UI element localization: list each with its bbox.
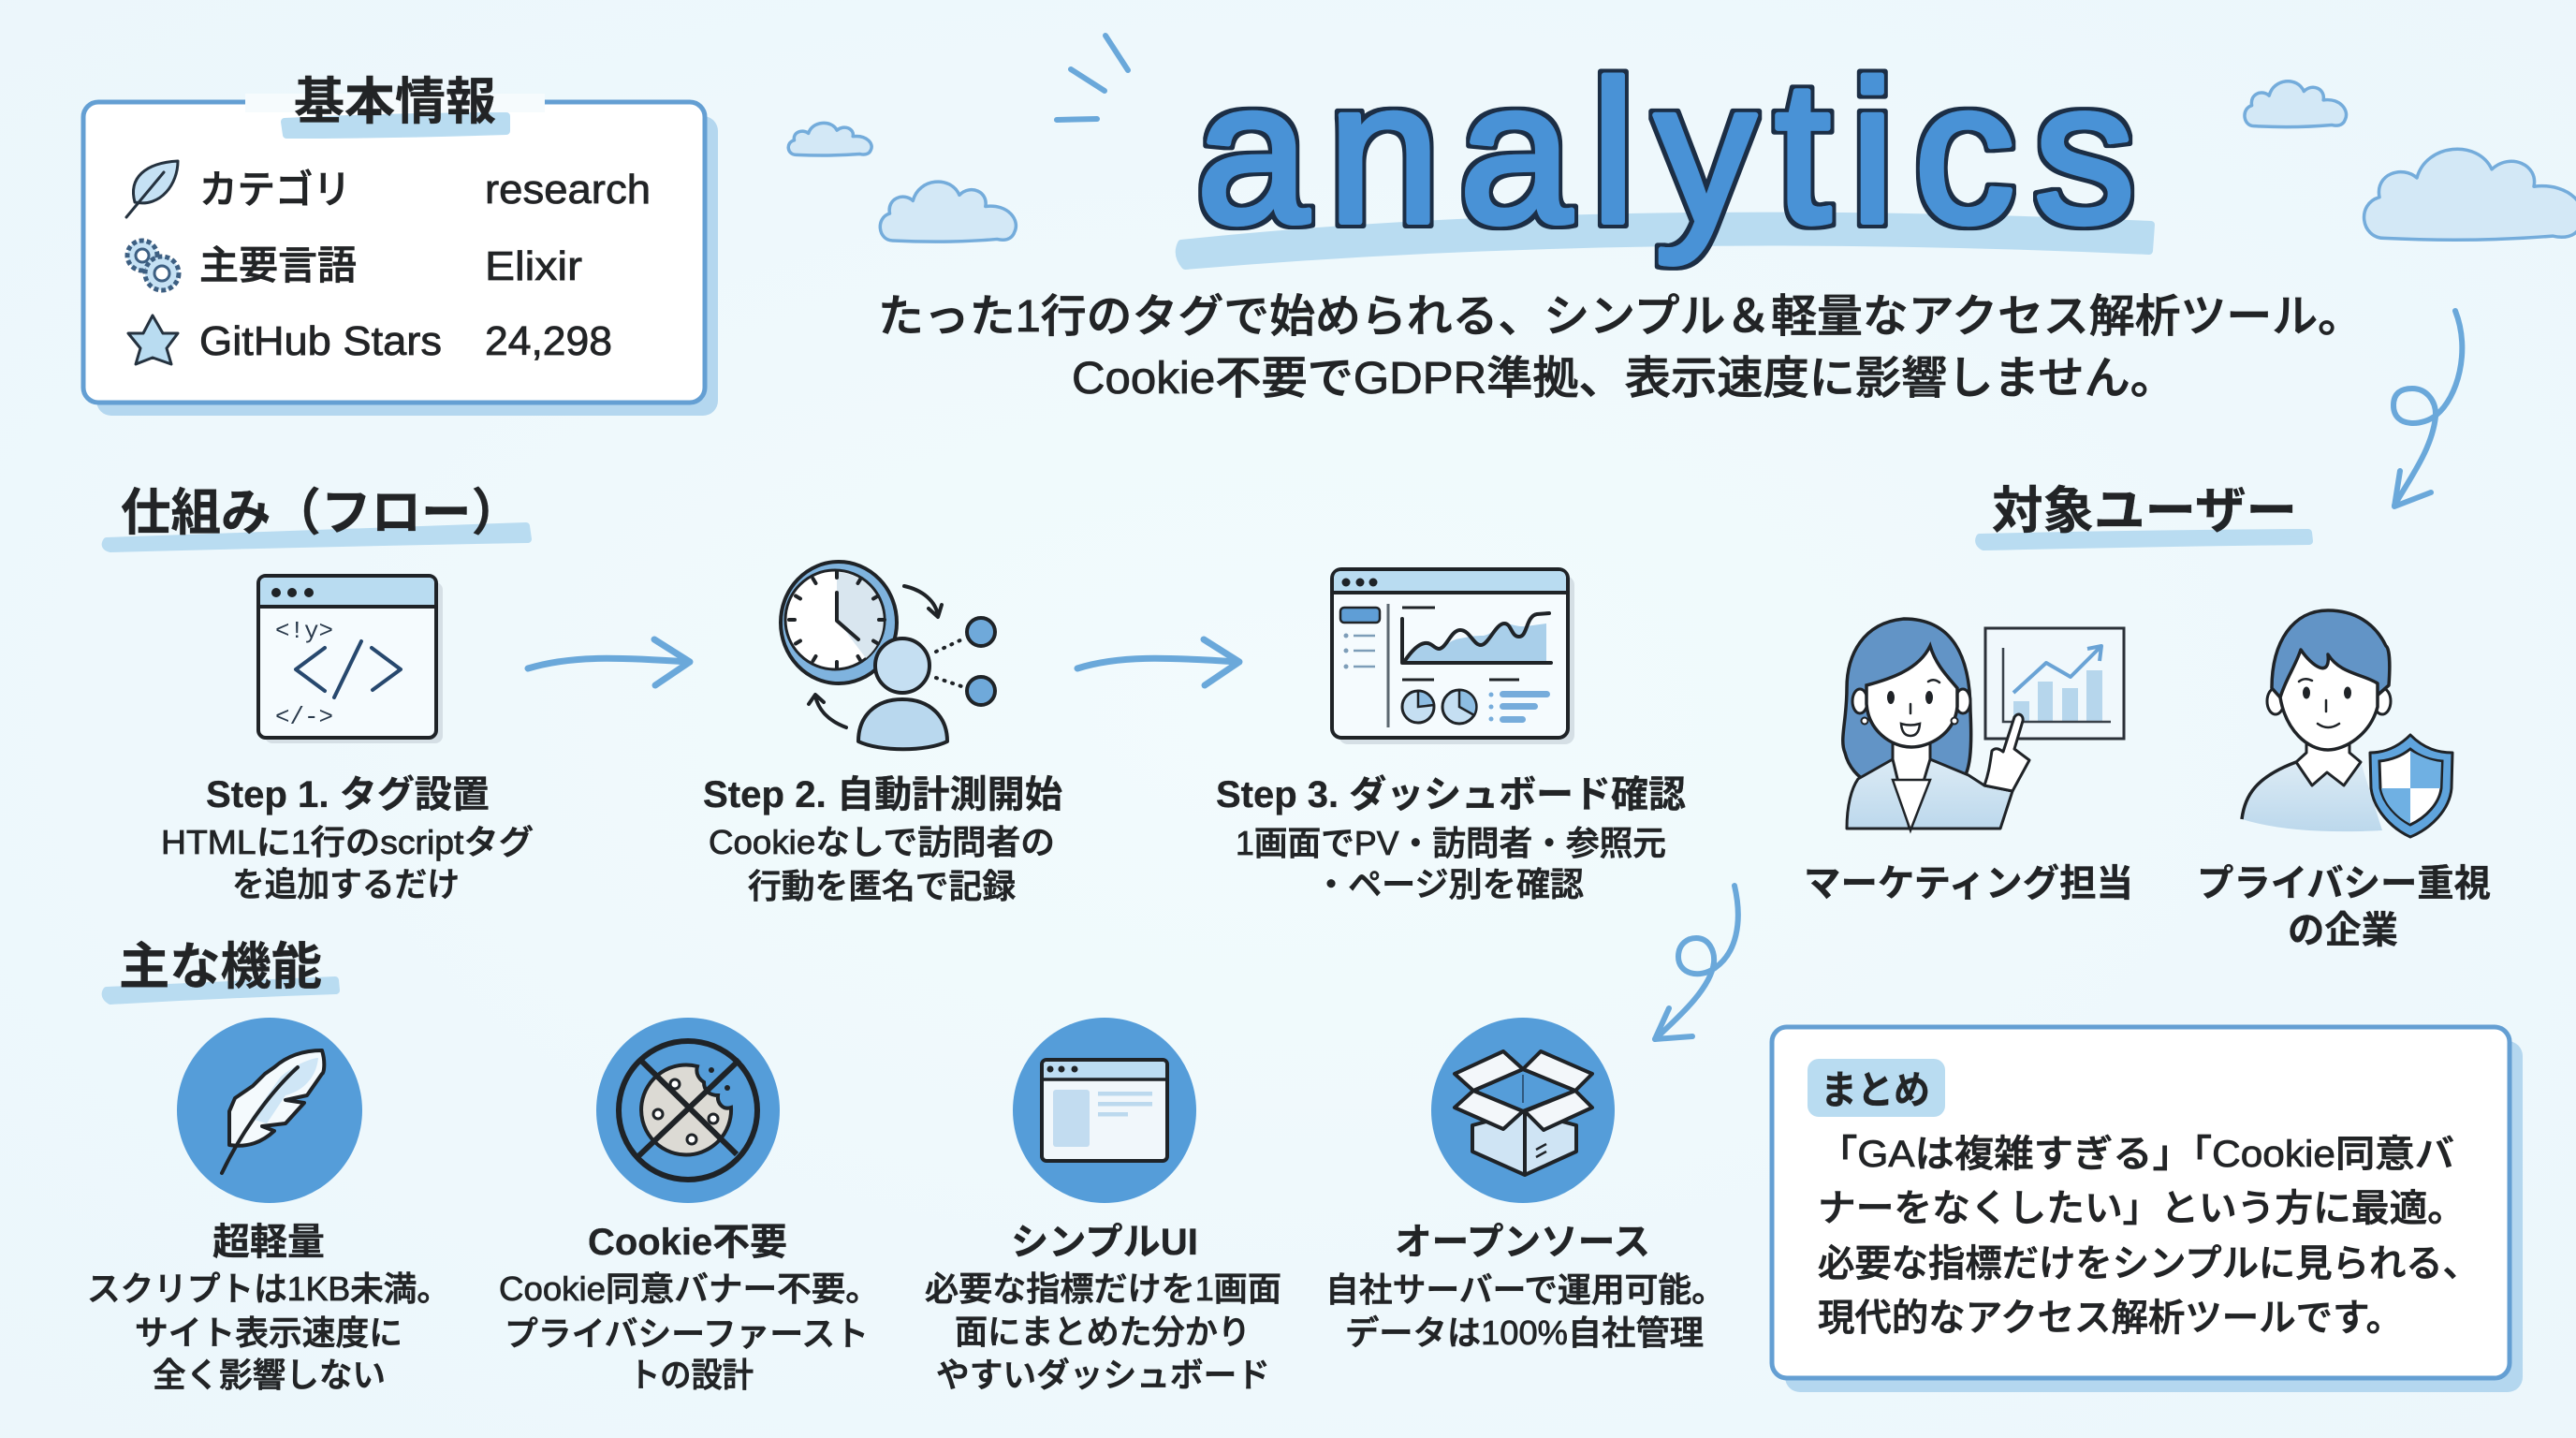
row: category: カテゴリ: [199, 168, 351, 212]
cloud: far right: [2364, 149, 2576, 240]
feature 4: open source: オープンソース: [1395, 1222, 1650, 1263]
feature 2: no cookie: Cookie不要: [588, 1222, 787, 1263]
icon: open box: [1431, 1018, 1615, 1203]
summary text: 必要な指標だけをシンプルに見られる、: [1818, 1243, 2480, 1284]
icon: gears: [127, 241, 179, 290]
row: category: [199, 167, 651, 213]
row: language: 主要言語: [199, 243, 357, 287]
summary tag: [1808, 1059, 1945, 1117]
persona: marketer: [1843, 619, 2124, 830]
icon: crossed cookie: [596, 1018, 780, 1203]
step 3 text: 1画面でPV・訪問者・参照元: [1236, 824, 1666, 862]
heading: basic info: 基本情報: [294, 74, 496, 130]
heading: target users: 対象ユーザー: [1992, 483, 2297, 539]
step 1 text: Step 1. タグ設置: [206, 774, 490, 815]
summary text: ナーをなくしたい」という方に最適。: [1818, 1188, 2466, 1229]
row: stars: 24,298: [485, 318, 612, 364]
panel: summary: [1772, 1027, 2523, 1392]
feature 2: no cookie: [499, 1018, 880, 1394]
step 1 text: [161, 774, 534, 903]
icon: dashboard: [1332, 569, 1574, 744]
step 3 text: [1216, 774, 1686, 903]
step 3 text: Step 3. ダッシュボード確認: [1216, 774, 1686, 815]
decorative sparks: [1057, 36, 1128, 120]
icon: star: [128, 315, 178, 364]
feature 4: open source: [1325, 1018, 1725, 1352]
chart board: [1985, 628, 2124, 739]
cloud: lower left: [880, 182, 1016, 242]
feature 2: no cookie: トの設計: [629, 1356, 754, 1394]
icon: clock and visitor: [781, 562, 995, 749]
step 1 text: HTMLに1行のscriptタグ: [161, 823, 534, 861]
panel: basic info: [83, 74, 718, 416]
icon: feather in circle: [177, 1018, 362, 1203]
heading: flow: 仕組み（フロー）: [121, 485, 521, 541]
persona: privacy-conscious company: [2242, 610, 2452, 837]
feature 1: ultra-light: 超軽量: [212, 1222, 325, 1263]
feature 1: ultra-light: [87, 1018, 450, 1394]
summary text: 「GAは複雑すぎる」「Cookie同意バ: [1818, 1134, 2454, 1175]
row: language: Elixir: [485, 243, 582, 289]
step 2 text: [703, 774, 1062, 905]
step 2 text: Step 2. 自動計測開始: [703, 774, 1062, 815]
arrow: step 1 to 2: [528, 639, 690, 685]
feature 3: simple UI: 必要な指標だけを1画面: [925, 1269, 1281, 1308]
heading: features: 主な機能: [119, 939, 322, 995]
icon: code window: </->: [275, 703, 333, 731]
summary tag: まとめ: [1821, 1068, 1930, 1112]
feature 1: ultra-light: 全く影響しない: [153, 1356, 386, 1394]
arrow: step 2 to 3: [1077, 639, 1239, 685]
feature 3: simple UI: [925, 1018, 1281, 1394]
arrow: to summary: [1655, 886, 1738, 1039]
row: language: [199, 243, 582, 289]
icon: simple window: [1013, 1018, 1196, 1203]
feature 4: open source: 自社サーバーで運用可能。: [1325, 1270, 1725, 1309]
row: stars: GitHub Stars: [199, 318, 442, 364]
feature 3: simple UI: 面にまとめた分かり: [955, 1313, 1251, 1351]
summary text: [1818, 1134, 2480, 1339]
persona labels: の企業: [2288, 910, 2398, 951]
feature 2: no cookie: プライバシーファースト: [505, 1314, 869, 1353]
cloud: small left: [788, 123, 871, 155]
step 2 text: 行動を匿名で記録: [748, 867, 1016, 905]
persona labels: マーケティング担当: [1804, 863, 2133, 904]
icon: shield: [2370, 735, 2452, 837]
subtitle: [878, 292, 2364, 404]
icon: code window: <!y>: [275, 617, 333, 645]
icon: code window: [258, 576, 443, 743]
feature 2: no cookie: Cookie同意バナー不要。: [499, 1269, 880, 1308]
persona labels: [1804, 863, 2491, 951]
persona labels: プライバシー重視: [2197, 863, 2491, 904]
summary text: 現代的なアクセス解析ツールです。: [1818, 1298, 2403, 1339]
step 1 text: を追加するだけ: [232, 865, 460, 903]
step 2 text: Cookieなしで訪問者の: [709, 823, 1055, 861]
feature 4: open source: データは100%自社管理: [1345, 1313, 1704, 1352]
cloud: top right: [2245, 81, 2347, 127]
icon: feather small: [126, 161, 178, 217]
row: category: research: [485, 167, 651, 213]
feature 3: simple UI: シンプルUI: [1011, 1222, 1198, 1263]
step 3 text: ・ページ別を確認: [1314, 865, 1584, 903]
row: stars: [199, 318, 612, 364]
feature 1: ultra-light: サイト表示速度に: [135, 1313, 402, 1352]
subtitle: たった1行のタグで始められる、シンプル＆軽量なアクセス解析ツール。: [878, 292, 2364, 342]
arrow: to target users: [2393, 311, 2462, 506]
feature 3: simple UI: やすいダッシュボード: [936, 1356, 1270, 1394]
subtitle: Cookie不要でGDPR準拠、表示速度に影響しません。: [1072, 354, 2176, 404]
title: analytics: [1196, 38, 2135, 265]
feature 1: ultra-light: スクリプトは1KB未満。: [87, 1269, 450, 1308]
